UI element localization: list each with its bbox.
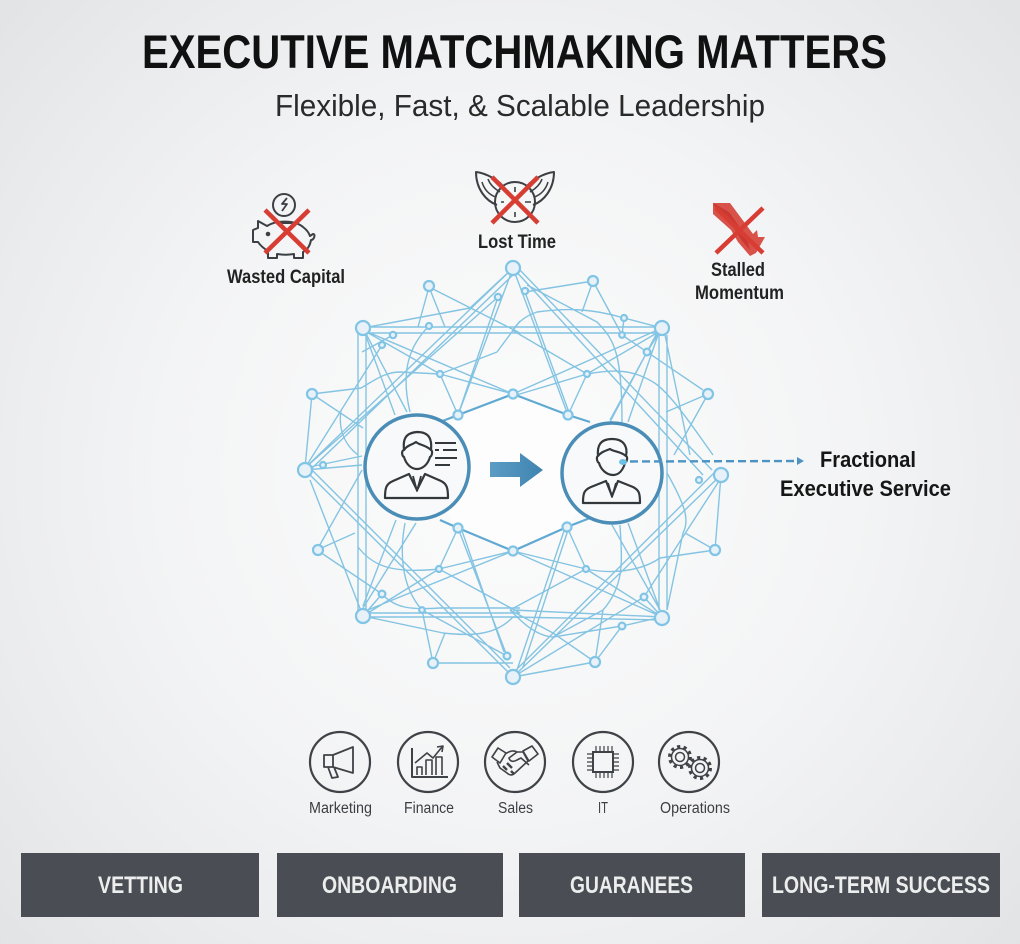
network diagram <box>298 261 728 684</box>
icon group: stalled momentum <box>713 203 765 256</box>
arrow <box>490 453 543 487</box>
icon group: lost time <box>476 172 554 223</box>
label: stalled momentum: Momentum <box>695 283 784 304</box>
label: lost time: Lost Time <box>478 232 556 253</box>
top left edges <box>305 268 662 616</box>
function icon: marketing <box>310 732 370 792</box>
label: finance: Finance <box>404 800 454 817</box>
label: stalled momentum <box>695 260 784 304</box>
function icon: operations <box>659 732 719 792</box>
icon group: wasted capital <box>253 194 314 258</box>
dashed connector arrow <box>619 457 804 465</box>
label: stalled momentum: Stalled <box>711 260 765 281</box>
bar: onboarding <box>277 853 503 917</box>
bottom left edges <box>305 468 520 677</box>
bar: guarantees: GUARANEES <box>570 872 693 899</box>
bar: vetting: VETTING <box>98 872 183 899</box>
bar: onboarding: ONBOARDING <box>322 872 457 899</box>
label: fractional executive service <box>780 447 951 501</box>
inner hexagon <box>440 394 590 551</box>
bottom right edges <box>510 470 721 677</box>
bar: long-term success <box>762 853 1000 917</box>
top right edges <box>512 268 713 610</box>
function icon: sales <box>485 732 545 792</box>
bar: vetting <box>21 853 259 917</box>
person circle: fractional executive <box>562 423 662 523</box>
bar: guarantees <box>519 853 745 917</box>
label: sales: Sales <box>498 800 533 817</box>
label: fractional executive service: Executive Service <box>780 476 951 501</box>
function icon: IT <box>573 732 633 792</box>
label: wasted capital: Wasted Capital <box>227 267 345 288</box>
label: marketing: Marketing <box>309 800 372 817</box>
node set <box>298 261 728 684</box>
label: IT: IT <box>598 800 608 817</box>
person circle: candidate <box>365 415 469 519</box>
label: fractional executive service: Fractional <box>820 447 916 472</box>
function icon: finance <box>398 732 458 792</box>
title: EXECUTIVE MATCHMAKING MATTERS <box>142 25 887 78</box>
label: operations: Operations <box>660 800 730 817</box>
subtitle: Flexible, Fast, & Scalable Leadership <box>275 88 765 123</box>
